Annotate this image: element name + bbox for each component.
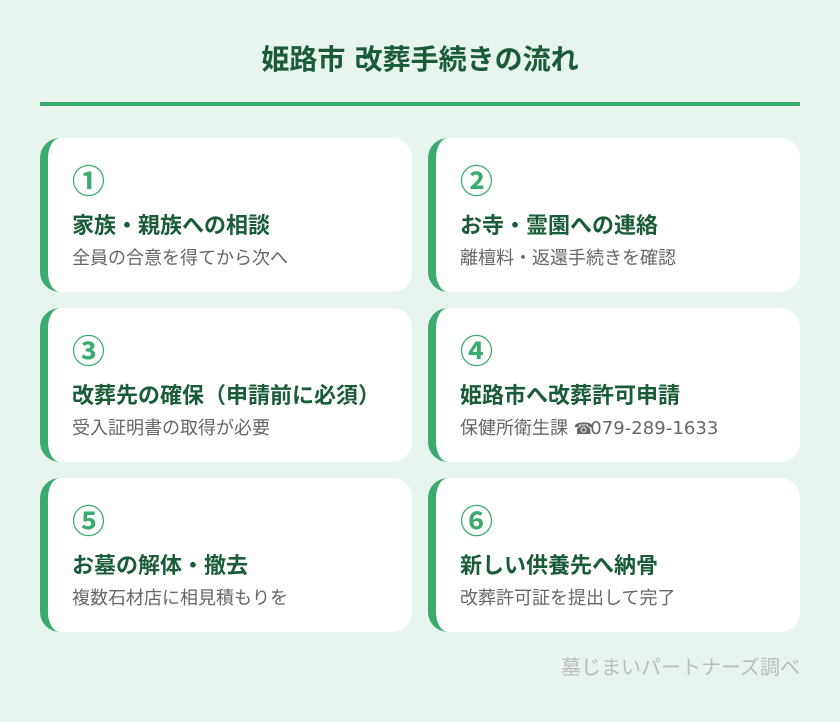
panel: step 5 [40, 478, 412, 632]
title underline [40, 102, 800, 106]
step 3 description: 受入証明書の取得が必要 [72, 418, 270, 439]
step 1 description: 全員の合意を得てから次へ [72, 248, 288, 269]
title: 姫路市 改葬手続きの流れ [261, 38, 579, 78]
step 6 heading: 新しい供養先へ納骨 [460, 548, 658, 580]
step 4 description with phone number: ☎ [574, 419, 594, 438]
step 5 description: 複数石材店に相見積もりを [72, 588, 288, 609]
panel: step 1 [40, 138, 412, 292]
step 3 heading: 改葬先の確保（申請前に必須） [72, 378, 380, 410]
panel: step 3 [40, 308, 412, 462]
step 4 heading: 姫路市へ改葬許可申請 [460, 378, 680, 410]
step number 2: ② [460, 155, 493, 203]
step number 3: ③ [72, 325, 105, 373]
step 2 heading: お寺・霊園への連絡 [460, 208, 658, 240]
panel: step 6 [428, 478, 800, 632]
step number 1: ① [72, 155, 105, 203]
panel: step 2 [428, 138, 800, 292]
step 1 heading: 家族・親族への相談 [72, 208, 270, 240]
step 6 description: 改葬許可証を提出して完了 [460, 588, 675, 609]
source credit: 墓じまいパートナーズ調べ [561, 655, 800, 679]
panel: step 4 [428, 308, 800, 462]
step 4 description with phone number: 保健所衛生課 079-289-1633 [460, 418, 718, 439]
step 5 heading: お墓の解体・撤去 [72, 548, 248, 580]
step 2 description: 離檀料・返還手続きを確認 [460, 248, 676, 269]
step number 6: ⑥ [460, 495, 493, 543]
step number 4: ④ [460, 325, 493, 373]
step number 5: ⑤ [72, 495, 105, 543]
